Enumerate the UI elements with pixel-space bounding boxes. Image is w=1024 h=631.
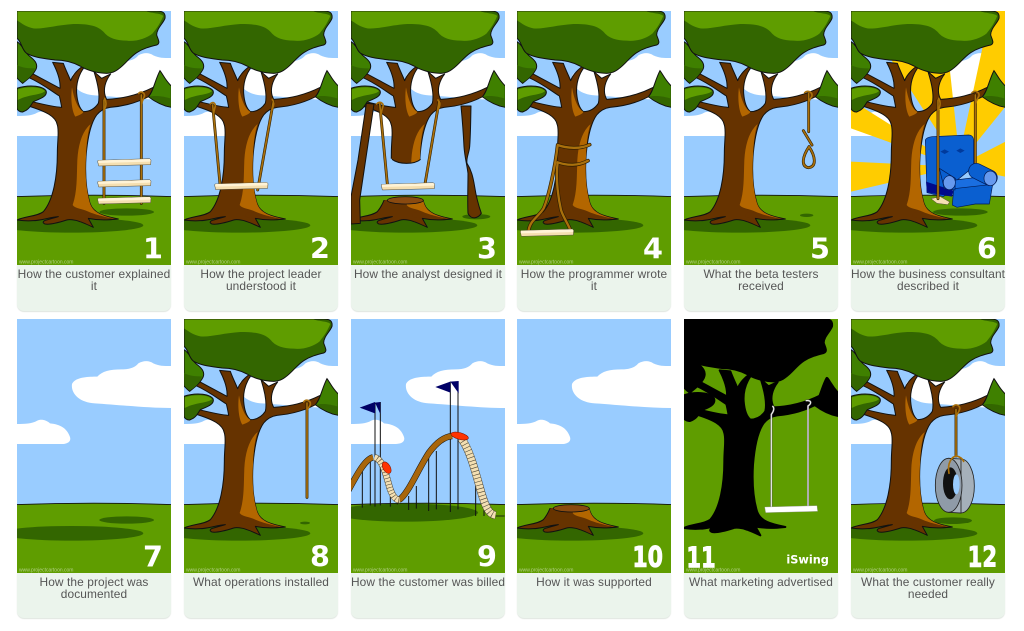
caption 12: needed [908, 587, 948, 601]
hanging rope [304, 400, 310, 497]
tire swing [935, 405, 974, 513]
swing across the trunk [210, 99, 274, 190]
caption 12: What the customer really [861, 575, 995, 589]
caption 1: it [91, 279, 97, 293]
caption 2: How the project leader [200, 267, 322, 281]
number 4: 4 [643, 231, 663, 265]
caption 8 [184, 573, 338, 618]
panel 4: how the programmer wrote it [517, 11, 671, 312]
illustration 7: empty landscape with shadows only [17, 319, 171, 573]
illustration 8: tree with single hanging rope [184, 319, 338, 573]
panel 3: how the analyst designed it [351, 11, 505, 312]
caption 5: What the beta testers [703, 267, 819, 281]
stump [517, 370, 653, 535]
number 5: 5 [810, 231, 830, 265]
caption 11 [684, 573, 838, 618]
rope and grounded seat [520, 145, 590, 236]
sun rays [851, 11, 1005, 192]
caption 3 [351, 265, 505, 311]
caption 4 [517, 265, 671, 311]
panel 9: how the customer was billed [351, 319, 505, 619]
panel 6: how the business consultant described it [851, 11, 1005, 312]
roller coaster [348, 381, 505, 516]
right prop post [461, 106, 481, 218]
caption 4: How the programmer wrote [521, 267, 667, 281]
swing from prop and branch [377, 100, 440, 190]
panel 8: what operations installed [184, 319, 338, 619]
caption 8: What operations installed [193, 575, 329, 589]
white swing [765, 401, 818, 513]
illustration 11: black silhouette advert [684, 319, 838, 573]
illustration 12: tire swing [851, 319, 1005, 573]
panel 11: what marketing advertised [684, 319, 838, 619]
number 2: 2 [310, 231, 330, 265]
caption 2 [184, 265, 338, 311]
number 8: 8 [310, 539, 330, 573]
caption 11: What marketing advertised [689, 575, 833, 589]
caption 6: How the business consultant [851, 267, 1005, 281]
panel 12: what the customer really needed [851, 319, 1005, 619]
caption 4: it [591, 279, 597, 293]
caption 1 [17, 265, 171, 311]
panel 1: how the customer explained it [17, 11, 171, 312]
illustration 10: tree stump [517, 319, 671, 573]
caption 1: How the customer explained [18, 267, 170, 281]
number 3: 3 [477, 231, 497, 265]
illustration 5: tree with noose [684, 11, 838, 265]
tree silhouette [684, 319, 838, 535]
noose [803, 91, 814, 168]
number 7: 7 [143, 539, 163, 573]
illustration 9: roller coaster [351, 319, 505, 573]
armchair and ropes [925, 91, 997, 207]
illustration 2: swing hung around the trunk [184, 11, 338, 265]
caption 7: How the project was [40, 575, 148, 589]
number 9: 9 [477, 539, 497, 573]
caption 6 [851, 265, 1005, 311]
left prop post [351, 103, 374, 224]
illustration 1: tree with three-seat swing [17, 11, 171, 265]
caption 6: described it [897, 279, 959, 293]
caption 5: received [738, 279, 784, 293]
caption 9: How the customer was billed [351, 575, 505, 589]
number 6: 6 [977, 231, 997, 265]
illustration 6: armchair swing with sunburst [851, 11, 1005, 265]
panel 10: how it was supported [517, 319, 671, 619]
caption 10 [517, 573, 671, 618]
illustration 4: rope tied round the trunk, seat on the ground [517, 11, 671, 265]
brand name: iSwing [786, 553, 829, 567]
caption 3: How the analyst designed it [354, 267, 502, 281]
caption 12 [851, 573, 1005, 618]
panel 5: what the beta testers received [684, 11, 838, 312]
swing: two ropes with three seats [98, 92, 151, 204]
caption 5 [684, 265, 838, 311]
caption 7 [17, 573, 171, 618]
stump [351, 62, 487, 227]
caption 10: How it was supported [536, 575, 652, 589]
illustration 3: cut trunk propped on posts [351, 11, 505, 265]
caption 9 [351, 573, 505, 618]
number 1: 1 [143, 231, 163, 265]
caption 7: documented [61, 587, 127, 601]
suspended upper trunk [363, 62, 487, 164]
caption 2: understood it [226, 279, 296, 293]
panel 7: how the project was documented [17, 319, 171, 619]
panel 2: how the project leader understood it [184, 11, 338, 312]
